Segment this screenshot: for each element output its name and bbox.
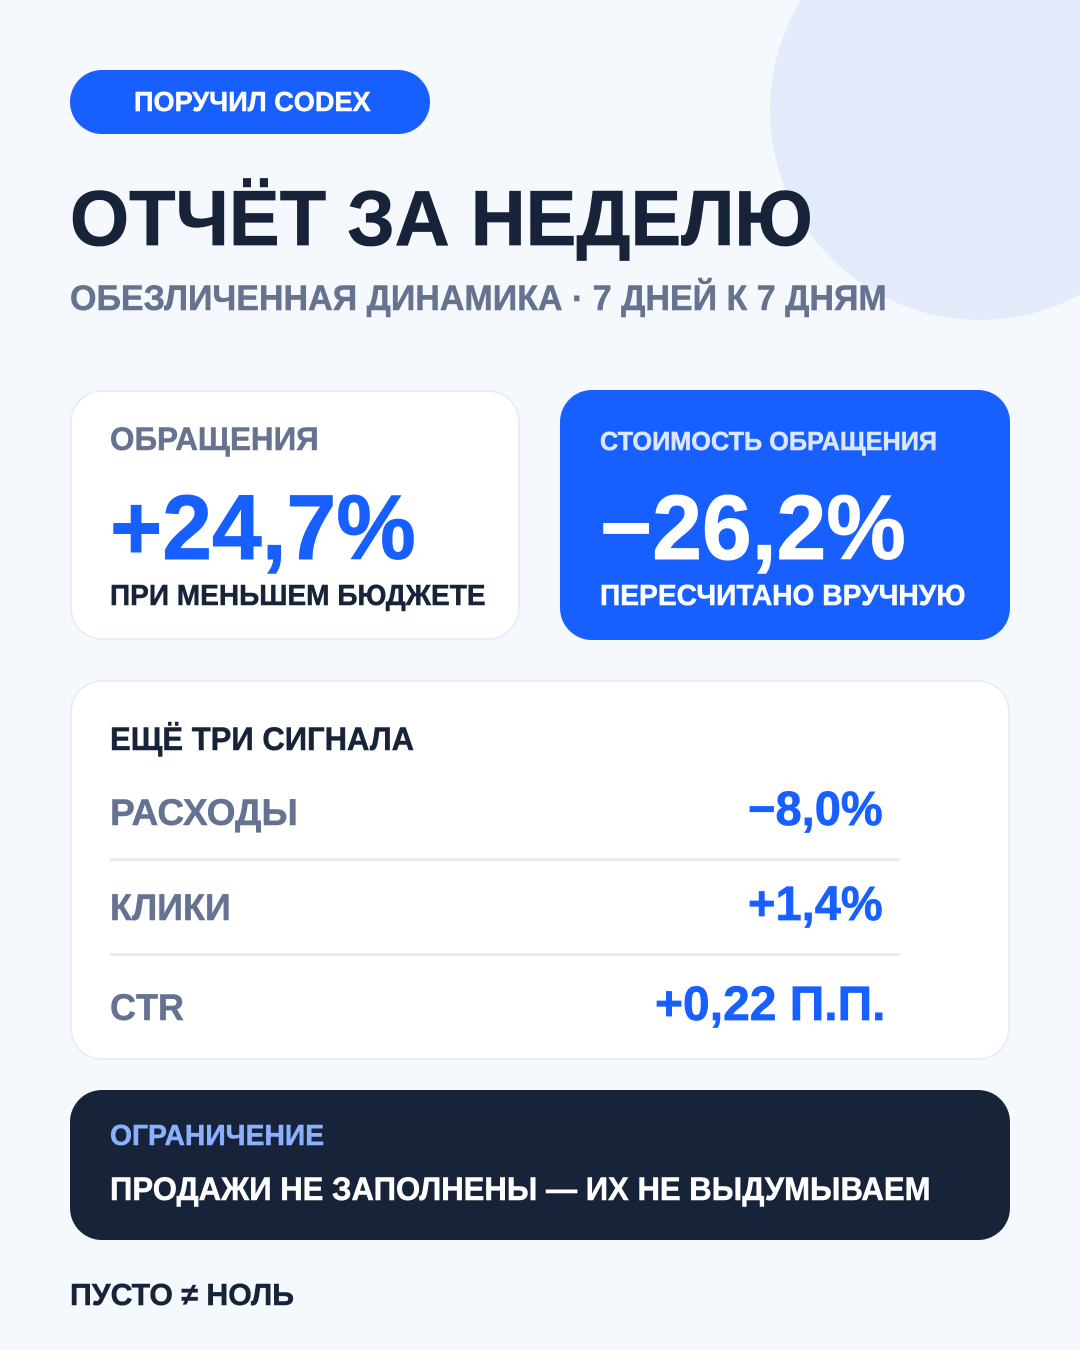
row: clicks label: КЛИКИ: [110, 887, 231, 928]
panel: limitation: [70, 1090, 1010, 1240]
decorative circle: [770, 0, 1080, 320]
cost note: ПЕРЕСЧИТАНО ВРУЧНУЮ: [600, 580, 965, 612]
requests value: +24,7%: [110, 477, 416, 579]
row: spend value: −8,0%: [748, 783, 882, 836]
subtitle: ОБЕЗЛИЧЕННАЯ ДИНАМИКА · 7 ДНЕЙ К 7 ДНЯМ: [70, 279, 887, 318]
limitation label: ОГРАНИЧЕНИЕ: [110, 1120, 324, 1152]
footer: ПУСТО ≠ НОЛЬ: [70, 1277, 294, 1312]
panel: cost per request: [560, 390, 1010, 640]
row: spend label: РАСХОДЫ: [110, 792, 298, 833]
requests note: ПРИ МЕНЬШЕМ БЮДЖЕТЕ: [110, 580, 486, 612]
badge: [70, 70, 430, 134]
panel: requests: [70, 390, 520, 640]
panel: three signals: [70, 680, 1010, 1060]
cost label: СТОИМОСТЬ ОБРАЩЕНИЯ: [600, 426, 937, 456]
row: clicks value: +1,4%: [748, 878, 882, 931]
signals heading: ЕЩЁ ТРИ СИГНАЛА: [110, 721, 414, 757]
limitation text: ПРОДАЖИ НЕ ЗАПОЛНЕНЫ — ИХ НЕ ВЫДУМЫВАЕМ: [110, 1171, 930, 1207]
title: ОТЧЁТ ЗА НЕДЕЛЮ: [70, 174, 813, 262]
row: ctr value: +0,22 П.П.: [655, 978, 885, 1031]
badge text: ПОРУЧИЛ CODEX: [134, 86, 371, 117]
requests label: ОБРАЩЕНИЯ: [110, 421, 319, 457]
cost value: −26,2%: [600, 477, 906, 579]
row: ctr label: CTR: [110, 987, 184, 1028]
